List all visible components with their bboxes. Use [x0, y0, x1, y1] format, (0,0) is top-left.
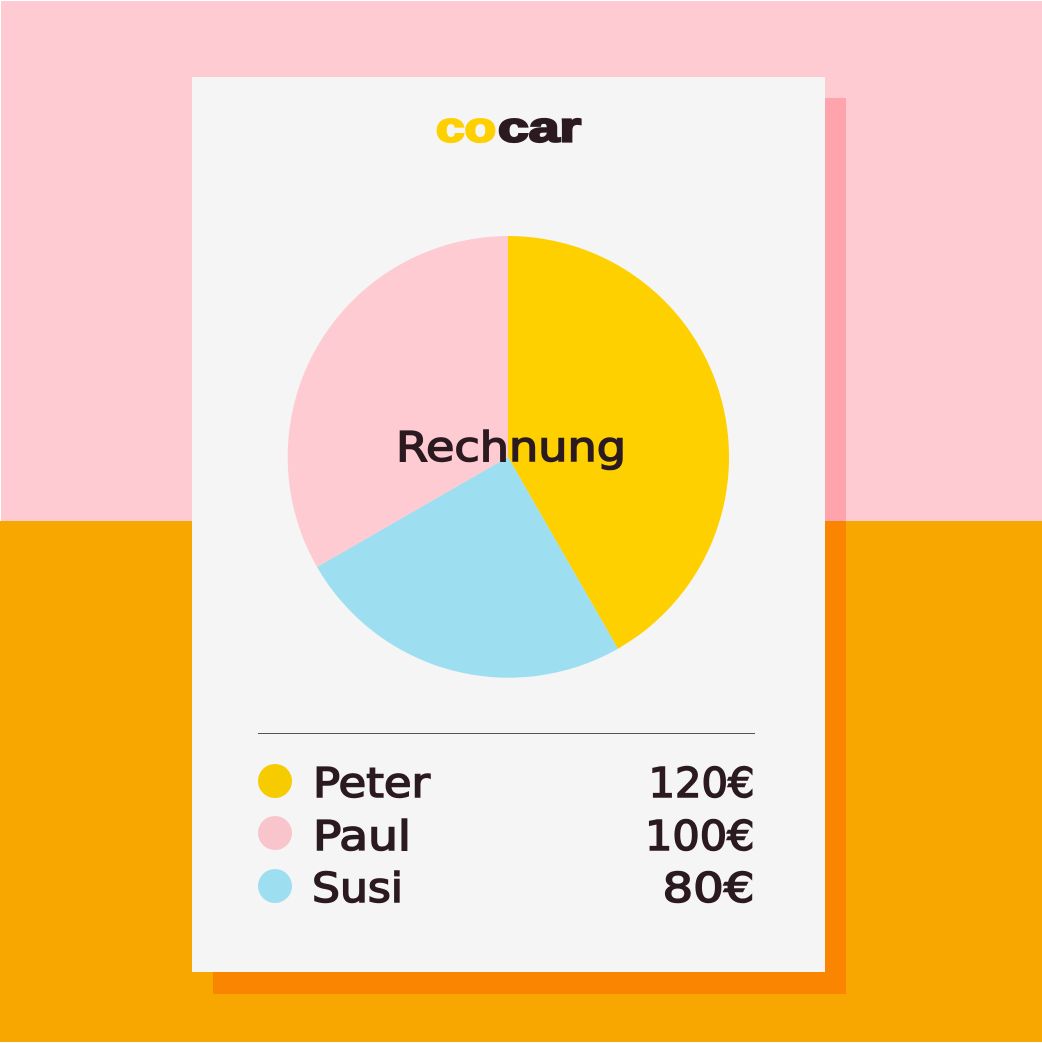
- background: pink upper band: [1, 1, 1042, 521]
- legend row: Susi: [258, 864, 754, 912]
- logo: cocar: [436, 105, 582, 150]
- chart center label: Rechnung: [396, 423, 626, 471]
- amount: Peter: 120€: [648, 759, 754, 807]
- marker: Peter: [258, 764, 292, 798]
- slice: Susi: [317, 457, 618, 678]
- name: Peter: Peter: [313, 759, 430, 807]
- pie chart: [288, 236, 729, 678]
- background: orange lower band: [0, 521, 1042, 1042]
- divider: [258, 733, 755, 734]
- name: Paul: Paul: [313, 812, 411, 860]
- legend row: Peter: [258, 759, 754, 807]
- panel: invoice card: [192, 77, 825, 972]
- amount: Paul: 100€: [645, 812, 754, 860]
- amount: Susi: 80€: [662, 864, 754, 912]
- card shadow on orange: [213, 521, 846, 994]
- slice: Paul: [288, 236, 508, 567]
- marker: Paul: [258, 816, 292, 850]
- card shadow on pink: [213, 98, 846, 521]
- legend row: Paul: [258, 812, 754, 860]
- name: Susi: Susi: [312, 864, 403, 912]
- marker: Susi: [258, 869, 292, 903]
- slice: Peter: [508, 236, 729, 649]
